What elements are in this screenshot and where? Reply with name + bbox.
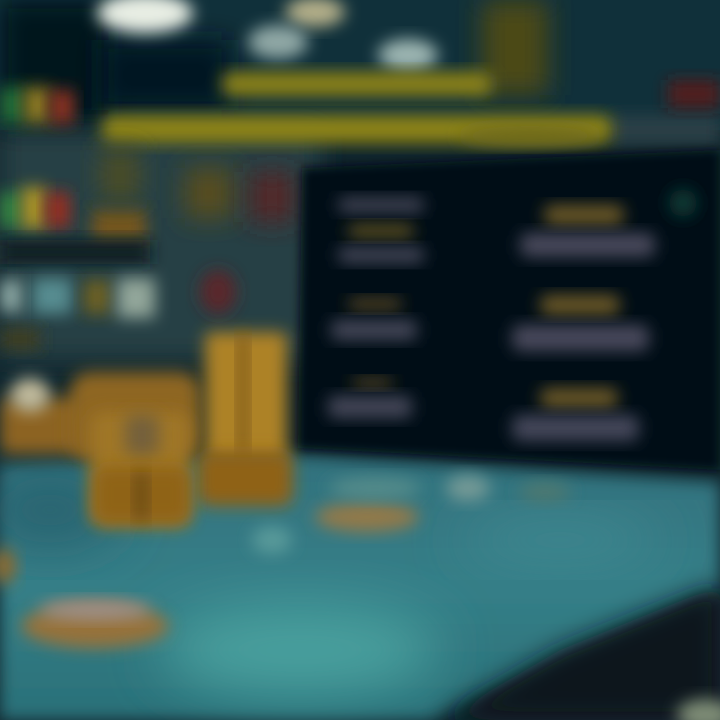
panel text: right column	[512, 205, 655, 441]
blurred yellow title	[102, 72, 612, 146]
scattered coins on the table	[0, 475, 571, 648]
dark dashboard panel	[298, 150, 720, 470]
table surface	[0, 455, 720, 720]
coin stacks	[0, 332, 293, 526]
left column of coloured bars	[0, 87, 294, 350]
panel text: left column	[328, 197, 424, 418]
ceiling lights	[97, 0, 720, 108]
